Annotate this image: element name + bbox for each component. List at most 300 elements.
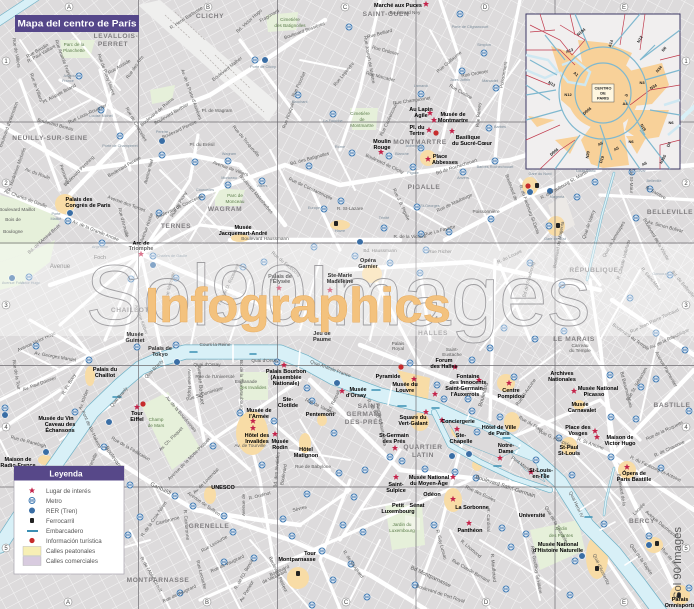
landmark labels: Picasso bbox=[584, 392, 605, 398]
metro stations: MMMMMMMMMMMMMMMMMMMMMMMMMMMMMMMMMMMMMMMMMMMMMMMMMMMMMMMMMMMMMMMMMMMMMMMMMMMMMMMMMMMMMMMMMMMMMMMMMMMMMMMMMMMMMMMMMMMMMMMMMMMMMMMMMMMMMMMMM bbox=[3, 12, 691, 608]
street labels: Avenue Daumesnil bbox=[644, 509, 678, 538]
street labels: Carreau bbox=[572, 343, 589, 348]
street labels: R. Cambronne bbox=[183, 509, 190, 541]
street labels: Rue Anatole France bbox=[54, 39, 73, 80]
title banner bbox=[15, 15, 139, 32]
district names: SAINT-OUEN bbox=[363, 11, 409, 18]
park and area labels: Cimetière bbox=[350, 111, 370, 116]
street labels: Royal bbox=[392, 346, 404, 351]
street labels: R. Claude Vellefaux bbox=[616, 238, 631, 280]
street labels: Boulevard Pereire bbox=[161, 119, 198, 140]
street labels: Avenue des Ternes bbox=[107, 194, 147, 213]
inset: road numbers: A4 bbox=[622, 101, 628, 106]
street labels: Rue de Bercy bbox=[660, 547, 683, 572]
street labels: Avenue de la Motte-Picquet bbox=[167, 436, 212, 481]
district names: QUARTIER bbox=[403, 444, 443, 451]
grid reference letters and numbers: B bbox=[205, 600, 209, 606]
street labels: Quai Henri IV bbox=[568, 491, 585, 519]
inset: road numbers: N12 bbox=[564, 92, 572, 97]
inset: road numbers: N6 bbox=[668, 120, 674, 125]
station name labels: Porte bbox=[51, 212, 61, 216]
street labels: Rue Ordener bbox=[372, 45, 400, 57]
tourist info icons bbox=[140, 130, 531, 407]
landmark labels: Carnavalet bbox=[568, 408, 596, 414]
street labels: Esplanade bbox=[235, 379, 257, 384]
inset: red roads bbox=[526, 14, 680, 169]
station name labels: Argentine bbox=[92, 245, 108, 249]
Infographics overlay title: Infographics bbox=[145, 279, 451, 333]
station name labels: Courcelles bbox=[196, 188, 214, 192]
landmark labels: Place des bbox=[565, 425, 591, 431]
inset: road numbers bbox=[547, 26, 674, 167]
street labels: Av. Georges Mandel bbox=[34, 350, 77, 363]
street labels: R. de l'O. Benoit bbox=[233, 558, 255, 590]
inset: road numbers: A14 bbox=[607, 38, 614, 48]
grid reference letters and numbers: E bbox=[622, 5, 626, 11]
street labels: Bois de bbox=[5, 217, 21, 222]
watermark Sol90Images: Sol90Images bbox=[86, 248, 590, 344]
street labels: R. Cardinal bbox=[486, 508, 491, 532]
grid reference letters and numbers: 3 bbox=[684, 303, 688, 309]
grid reference letters and numbers: 1 bbox=[4, 59, 8, 65]
landmark labels: Place bbox=[433, 154, 447, 160]
inset: road numbers: D906 bbox=[549, 146, 560, 157]
street labels: Av. de la Porte d'Asnières bbox=[180, 69, 203, 121]
station name labels: Trinité bbox=[379, 216, 389, 220]
landmark labels: Pompidou bbox=[498, 394, 524, 400]
grid reference letters and numbers: D bbox=[483, 5, 488, 11]
district names: LEVALLOIS- bbox=[94, 33, 138, 40]
credit: Sol 90 Images: Sol 90 Images bbox=[672, 526, 684, 599]
grid reference letters and numbers: E bbox=[622, 600, 626, 606]
street labels: R. du Faubourg St-Antoine bbox=[629, 455, 682, 483]
station name labels: Barbès bbox=[494, 125, 506, 129]
street labels: Sèvres bbox=[292, 504, 308, 513]
street labels: Franklin D. Roosevelt bbox=[217, 262, 241, 306]
street labels: du Temple bbox=[569, 348, 591, 353]
street labels: Av. du Roule bbox=[24, 167, 51, 181]
landmark labels: Caveau des bbox=[45, 422, 75, 428]
title banner: Mapa del centro de París bbox=[18, 18, 136, 28]
station name labels: Gare du Nord bbox=[528, 172, 552, 176]
station name labels: Charles de Gaulle bbox=[157, 254, 187, 258]
station name labels: Louise Michel bbox=[89, 114, 113, 118]
landmark labels: Petit bbox=[392, 503, 404, 509]
park and area labels: des Invalides bbox=[240, 385, 267, 390]
landmark labels: Panthéon bbox=[457, 528, 483, 534]
district names: NEUILLY-SUR-SEINE bbox=[12, 135, 88, 142]
faint labels over band: Garnier bbox=[358, 264, 379, 270]
street labels: Bd. de l'Amiral Bruix bbox=[27, 223, 62, 255]
landmark labels: Hôtel des bbox=[245, 433, 269, 439]
landmark labels: Dame bbox=[499, 449, 513, 455]
landmark labels: l'Armée bbox=[249, 414, 269, 420]
street labels: Perronnet bbox=[59, 164, 71, 186]
legend panel bbox=[14, 466, 124, 574]
district names: TERNES bbox=[161, 223, 191, 230]
points of interest stars bbox=[134, 1, 630, 526]
district names: LATIN bbox=[412, 452, 434, 459]
boat piers bbox=[113, 352, 592, 517]
station name labels: Porte de Champerret bbox=[102, 144, 139, 148]
landmark labels: Saint- bbox=[388, 482, 404, 488]
legend: points of interest: Lugar de interés bbox=[46, 488, 91, 495]
district names: DES-PRÉS bbox=[345, 417, 383, 426]
street labels: Rue Championnet bbox=[393, 95, 432, 106]
street labels: Rue de Varenne bbox=[304, 397, 337, 416]
street labels: R. Saint-Maur bbox=[640, 266, 663, 292]
station name labels: Pereire bbox=[156, 130, 168, 134]
inset: road numbers: D19 bbox=[598, 154, 605, 164]
landmark labels: Maison de bbox=[607, 435, 633, 441]
street labels: Avenue Kléber bbox=[134, 304, 149, 335]
landmark labels: Sénat bbox=[410, 503, 425, 509]
street labels: Quai de la Rapée bbox=[629, 543, 654, 576]
landmark labels: Luxembourg bbox=[381, 509, 415, 515]
street labels: Pont de Bir-Hakeim bbox=[81, 410, 102, 449]
street labels: Boulevard de Port Royal bbox=[416, 583, 465, 604]
park and area labels: Montmartre bbox=[350, 123, 374, 128]
street labels: Boulevard de Reims bbox=[139, 96, 175, 127]
street labels: Quai Anatole France bbox=[310, 359, 352, 378]
park and area labels: Parc de bbox=[227, 193, 243, 198]
street labels: Saint- bbox=[446, 347, 459, 352]
street labels: Rue d'Armaillé bbox=[117, 207, 130, 238]
landmark labels: Victor Hugo bbox=[604, 441, 636, 447]
landmark labels: Palais des bbox=[66, 197, 92, 203]
street labels: Rue Rouquier bbox=[281, 100, 296, 129]
street labels: Bd de Rochechouart bbox=[435, 157, 478, 176]
station name labels: Marcadet bbox=[482, 79, 499, 83]
faint labels over band: Opéra bbox=[360, 258, 377, 264]
inset: road numbers: A1 bbox=[572, 70, 580, 78]
street labels: R. du Faubourg St. Martin bbox=[540, 169, 589, 200]
street labels: Quai de Grenelle bbox=[79, 452, 99, 486]
street labels: Rue Geoffroy St-Hilaire bbox=[530, 545, 543, 594]
inset: centre box: PARIS bbox=[597, 96, 609, 100]
street labels: R. du Louvre bbox=[496, 249, 523, 265]
street labels: Rue de Prony bbox=[169, 190, 188, 218]
street labels: Rue Lecourbe bbox=[200, 534, 229, 553]
street labels: Rue Custine bbox=[448, 83, 474, 101]
district names: BELLEVILLE bbox=[647, 209, 693, 216]
legend: metro bbox=[28, 497, 62, 505]
park and area labels: Luxembourg bbox=[389, 528, 415, 533]
landmark labels: Hôtel de Ville bbox=[482, 425, 516, 431]
street labels: Garibaldi bbox=[149, 482, 172, 497]
landmark labels: Paris Bastille bbox=[617, 477, 651, 483]
street labels: Avenue Parmentier bbox=[654, 351, 679, 388]
park and area labels: de bbox=[359, 117, 365, 122]
landmark labels: Musée de bbox=[246, 408, 272, 414]
street labels: Rue Aristide bbox=[107, 58, 132, 75]
grid reference letters and numbers: 1 bbox=[684, 59, 688, 65]
landmark labels: l'Élysée bbox=[270, 277, 290, 285]
inset: road numbers: N19 bbox=[639, 123, 648, 132]
street labels: Quai de la Tournelle bbox=[544, 505, 569, 544]
grid reference letters and numbers: 2 bbox=[684, 181, 688, 187]
district names: HALLES bbox=[418, 330, 448, 337]
station name labels: Jules Joffrin bbox=[450, 78, 470, 82]
landmark labels: Ste- bbox=[283, 397, 293, 403]
street labels: Boulevard Pershing bbox=[63, 154, 95, 187]
inset: centre box: CENTRO bbox=[595, 86, 611, 90]
railway yards bbox=[138, 0, 575, 235]
landmark labels: Palais de bbox=[268, 274, 292, 280]
street labels: R. de la Victoire bbox=[393, 234, 427, 239]
street labels: Cambronne bbox=[155, 515, 180, 526]
faint labels over band: Paume bbox=[313, 337, 331, 343]
street labels: Av. Charles de Gaulle bbox=[3, 189, 48, 209]
street labels: Boulevard bbox=[103, 445, 123, 469]
landmark labels: Agile bbox=[414, 113, 428, 119]
station name labels: Rome bbox=[335, 145, 345, 149]
street labels: Avenue de bbox=[241, 493, 246, 516]
inset: road numbers: N13 bbox=[547, 80, 557, 88]
street labels: Rue de la Tour bbox=[11, 359, 22, 391]
street labels: Boulevard bbox=[478, 382, 490, 407]
district names: GERMAIN bbox=[346, 411, 382, 418]
legend: RER: RER (Tren) bbox=[46, 508, 77, 515]
street labels: Boulevard de la bbox=[616, 473, 627, 507]
street labels: Boulevard de Courcelles bbox=[155, 193, 204, 220]
street labels: Av. Ch. Floquet bbox=[158, 425, 184, 452]
landmark labels: Louvre bbox=[396, 388, 414, 394]
landmark labels: Maison de bbox=[5, 457, 31, 463]
street labels: Quai de Valmy bbox=[581, 209, 596, 240]
street labels: Rue Joseph de Maistre bbox=[363, 36, 376, 84]
landmark labels: Archives bbox=[550, 371, 574, 377]
faint labels over band: Jeu de bbox=[313, 331, 331, 337]
station name labels: Magenta bbox=[550, 195, 565, 199]
district names: CHAILLOT bbox=[111, 307, 149, 314]
landmark labels: Rodin bbox=[272, 445, 288, 451]
grid reference letters and numbers: B bbox=[206, 5, 210, 11]
street labels: Boulevard de Magenta bbox=[552, 221, 565, 268]
landmark labels: Tertre bbox=[409, 131, 425, 137]
landmark labels: Musée bbox=[571, 402, 589, 408]
park and area labels: de Mars bbox=[148, 423, 165, 428]
street labels: Boulevard bbox=[269, 564, 290, 577]
street labels: Boulevard Maillot bbox=[0, 207, 36, 212]
inset: road numbers: N6 bbox=[628, 139, 634, 144]
station name labels: Louis Blanc bbox=[576, 169, 596, 173]
landmark labels: Musée du bbox=[392, 382, 418, 388]
station name labels: Victor Hugo bbox=[20, 281, 40, 285]
street labels: Eustache bbox=[442, 352, 462, 357]
street labels: Boulevard du Temple bbox=[611, 322, 651, 352]
district names: PERRET bbox=[98, 41, 128, 48]
park and area labels: Planchette bbox=[63, 48, 85, 53]
street labels: Rue de l'Université bbox=[195, 374, 235, 379]
street labels: Boulevard Saint-Germain bbox=[475, 474, 536, 500]
street labels: Av. de la Grande Armée bbox=[72, 219, 120, 242]
landmark labels: Nationales bbox=[548, 377, 576, 383]
street labels: Avenue Rapp bbox=[187, 369, 192, 398]
street labels: R. de la Croix Nivert bbox=[140, 500, 168, 538]
street labels: R. de Vaugirard bbox=[342, 549, 365, 579]
landmark labels: Musée National bbox=[538, 542, 579, 548]
grid reference letters and numbers: A bbox=[67, 5, 71, 11]
street labels: Avenue de Suffren bbox=[187, 491, 221, 517]
station name labels: Goncourt bbox=[652, 272, 669, 276]
street labels: Rue Caulaincourt bbox=[379, 101, 399, 137]
landmark labels: Basilique bbox=[456, 135, 480, 141]
station name labels: Bolivar bbox=[634, 169, 647, 173]
street labels: R. Gay Lussac bbox=[435, 529, 448, 561]
station name labels: Monceau bbox=[221, 176, 237, 180]
street labels: Av. de Lowendal bbox=[192, 467, 220, 495]
street labels: Boulevard Malesherbes bbox=[238, 174, 274, 215]
street labels: Rue La Fayette bbox=[423, 224, 456, 237]
landmark labels: Arc de bbox=[132, 241, 150, 247]
landmark labels: St-Paul bbox=[560, 445, 579, 451]
station name labels: Gare de l'Est bbox=[544, 237, 567, 241]
grid reference letters and numbers: 4 bbox=[684, 425, 688, 431]
street labels: Fragonard bbox=[259, 8, 280, 23]
street labels: Boulevard bbox=[279, 464, 288, 486]
street labels: Palais bbox=[392, 341, 405, 346]
landmark labels: Montparnasse bbox=[278, 557, 316, 563]
street labels: Av. Pasteur bbox=[239, 579, 255, 603]
faint labels over band: Madeleine bbox=[327, 279, 353, 285]
district names: GRENELLE bbox=[189, 523, 229, 530]
street labels: Quai d'Austerlitz bbox=[592, 553, 611, 586]
street labels: Rue du Faubourg bbox=[270, 250, 302, 278]
street labels: Quai Branly bbox=[109, 386, 129, 408]
landmark labels: Triomphe bbox=[129, 246, 153, 252]
street labels: Cours la Reine bbox=[199, 342, 231, 347]
landmark labels: l'Auxerrois bbox=[451, 392, 479, 398]
inset: centre box: DE bbox=[600, 90, 606, 96]
landmark labels: Centre bbox=[502, 388, 520, 394]
street labels: Foch bbox=[94, 255, 106, 261]
street labels: Av. de la Bourdonnais bbox=[165, 395, 198, 434]
grid reference letters and numbers: C bbox=[344, 600, 349, 606]
street labels: Rue Guillaume bbox=[436, 50, 463, 74]
street labels: R. Lhomond bbox=[460, 539, 483, 559]
landmark labels: Square du bbox=[400, 415, 426, 421]
street labels: R. Ft. Bouy bbox=[61, 372, 77, 396]
landmark labels: Nationale) bbox=[273, 381, 299, 387]
street labels: Poissonniers bbox=[499, 60, 508, 88]
street labels: Boulevard Berthier bbox=[153, 102, 190, 126]
street labels: Rue St. Sébastien bbox=[625, 366, 649, 402]
islands bbox=[447, 420, 545, 482]
faint labels over band: Ste-Marie bbox=[328, 273, 352, 279]
street labels: Rue de Vaugirard bbox=[162, 584, 197, 604]
street labels: Bd. des Invalides bbox=[272, 451, 281, 488]
street labels: Boulevard Ney bbox=[390, 10, 421, 15]
landmark labels: Abbesses bbox=[432, 160, 458, 166]
street labels: R. du Faubourg St-Denis bbox=[518, 184, 541, 235]
landmark labels: Musée du Vin bbox=[38, 416, 74, 422]
legend: pedestrian streets: Calles peatonales bbox=[46, 548, 95, 555]
street labels: R. Paul Vaillant bbox=[26, 43, 57, 64]
station name labels: Barbès Rochechouart bbox=[477, 165, 514, 169]
grid reference letters and numbers: 3 bbox=[4, 303, 8, 309]
street labels: Pl. Aristide Briand bbox=[42, 83, 77, 105]
street labels: Rue de Vaugirard bbox=[210, 554, 245, 574]
landmark labels: Moulin bbox=[373, 139, 391, 145]
landmark labels: Palais Bourbon bbox=[266, 369, 307, 375]
landmark labels: Musée National bbox=[409, 475, 450, 481]
street labels: Quai de Jemmapes bbox=[601, 220, 626, 258]
district names: RÉPUBLIQUE bbox=[569, 265, 619, 274]
street labels: Rue de Villiers bbox=[29, 72, 44, 103]
street labels: R. St-Lazare bbox=[337, 206, 364, 211]
station name labels: Belleville bbox=[647, 179, 661, 183]
inset: centre box bbox=[592, 84, 614, 102]
district names: PIGALLE bbox=[408, 184, 440, 191]
inset: road numbers: A6 bbox=[641, 160, 648, 167]
grid reference letters and numbers: C bbox=[343, 5, 348, 11]
street labels: Rue de Maubeuge bbox=[436, 192, 473, 213]
inset: road numbers: N34 bbox=[649, 82, 658, 91]
landmark labels: Hôtel bbox=[299, 447, 313, 453]
landmark labels: Matignon bbox=[294, 453, 319, 459]
park and area labels: Monceau bbox=[226, 199, 245, 204]
legend: tourist info: Información turística bbox=[46, 538, 102, 545]
landmark labels: Échansons bbox=[45, 426, 75, 434]
street labels: Rue des Écoles bbox=[465, 484, 498, 503]
street labels: Rue St-Dominique bbox=[186, 385, 224, 402]
street labels: Bd de Strasbourg bbox=[521, 261, 536, 298]
street labels: Rue de Prony Villiers bbox=[97, 53, 116, 96]
station name labels: Wagram bbox=[222, 152, 236, 156]
landmark labels: UNESCO bbox=[211, 485, 235, 491]
street labels: Boulevard Bineau bbox=[37, 117, 74, 132]
street labels: Bd. Victor Hugo bbox=[235, 8, 263, 34]
station name labels: Villiers bbox=[256, 184, 268, 188]
landmark labels: Montmartre bbox=[438, 118, 468, 124]
landmark labels: Musée bbox=[271, 439, 289, 445]
street labels: Quai Branly bbox=[144, 358, 165, 379]
faint labels over band bbox=[126, 258, 379, 358]
station name labels: Havre bbox=[335, 229, 345, 233]
district names: WAGRAM bbox=[208, 206, 242, 213]
inset: road numbers: N12 bbox=[636, 34, 644, 44]
street labels: Av. Kléber bbox=[78, 388, 90, 410]
grid reference letters and numbers: 5 bbox=[684, 546, 688, 552]
station name labels: Avenue Foch bbox=[2, 281, 24, 285]
street labels: Boulevard Bessières bbox=[283, 21, 326, 40]
inset: road numbers: P bbox=[624, 93, 629, 98]
street labels: de Vaugirard bbox=[261, 569, 288, 585]
street labels: Rue Richer bbox=[428, 249, 452, 254]
street labels: Rue Belliard bbox=[367, 28, 393, 39]
landmark labels: Conciergerie bbox=[441, 419, 475, 425]
landmark labels: Fontaine bbox=[457, 374, 479, 380]
street labels: R. Henri Barbusse bbox=[169, 5, 204, 30]
park and area labels: Cimetière bbox=[280, 17, 300, 22]
inset: road numbers: A13 bbox=[565, 47, 575, 54]
street labels: Rue du Plast bbox=[518, 415, 544, 433]
street labels: Rue de Tocqueville bbox=[232, 124, 261, 158]
street labels: Lacuée bbox=[632, 501, 646, 516]
park and area labels: Champ bbox=[149, 417, 164, 422]
faint labels over band: Guimet bbox=[126, 338, 145, 344]
landmark labels: St-Germain bbox=[379, 433, 409, 439]
street labels: R. Madeleine Michelis bbox=[6, 146, 27, 192]
landmark labels: d'Orsay bbox=[346, 393, 367, 399]
street labels: R. Oudinot bbox=[248, 490, 272, 501]
landmark labels: Sulpice bbox=[386, 488, 406, 494]
faint labels over band: Musée bbox=[126, 332, 144, 338]
station name labels: Simplon bbox=[477, 43, 491, 47]
station name labels: Lamarck bbox=[414, 84, 428, 88]
street labels: Rue Pouchet bbox=[291, 70, 307, 98]
